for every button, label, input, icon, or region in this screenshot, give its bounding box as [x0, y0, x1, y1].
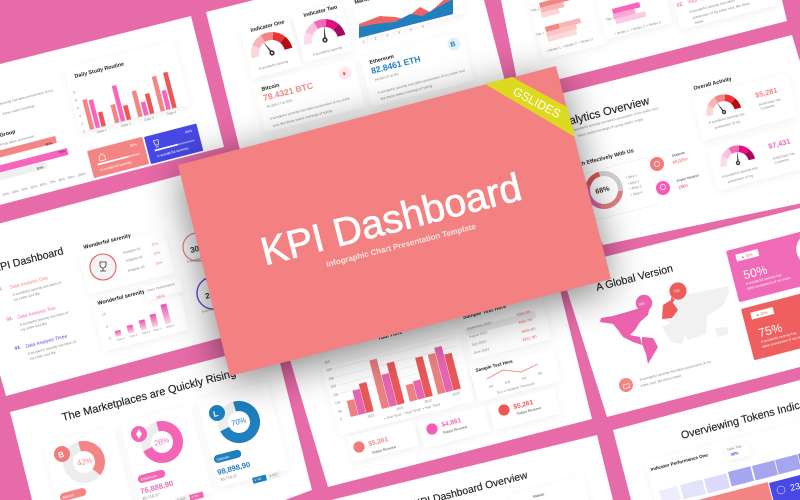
title: a global version: A Global Version: [595, 262, 674, 294]
card: 75% red: 75%: [757, 320, 784, 340]
card: daily study routine bar chart: 8: [75, 98, 78, 103]
item: data analysis two: 02.: [6, 316, 13, 322]
card: daily study routine bar chart: 9: [73, 91, 76, 95]
card: class performance bars: 0: [109, 336, 112, 341]
card: donut chart 68%: [575, 157, 661, 222]
item: data analysis two: Data Analysis Two: [17, 305, 57, 321]
card: bitcoin donut: [43, 427, 135, 500]
card: bitcoin: soul, like these sweet mornings of spring.: [272, 109, 333, 128]
card: class performance bars: Data 1: [116, 336, 126, 342]
card: sample text table: August 2023: [468, 330, 488, 339]
card: todays revenue pink: [418, 406, 490, 448]
card: todays revenue red: $5,261: [513, 399, 534, 411]
card: daily study routine bar chart: [64, 41, 190, 138]
card: todays revenue red: [488, 388, 560, 430]
ribbon: gslides: GSLIDES: [511, 84, 563, 121]
icon and global description: A wonderful serenity has taken possession of my: [639, 360, 712, 382]
progress bars: 40%: [36, 165, 44, 171]
card: ring 20 percent purple: A wonderful: [201, 306, 220, 314]
title: marketplaces rising: The Marketplaces are Quickly Rising: [61, 367, 237, 424]
card: numbered item 02: sweet: [694, 19, 704, 25]
card: indicator two gauge: Indicator Two: [303, 4, 339, 19]
card: yearly bar chart: 2022: [424, 398, 432, 404]
card: line chart: Text 1 Hundred Thousand: [496, 381, 535, 395]
card: daily study routine bar chart: Data 4: [166, 110, 177, 116]
card: 50% pink: [726, 225, 800, 302]
card: blue progress: [144, 123, 203, 164]
card: activity gauge red: Customer: [760, 103, 776, 111]
text block: analytics description: these sweet mornings of spring which I enjoy: [577, 117, 644, 138]
card: class performance bars: 5: [106, 325, 109, 329]
text block: partial description: [0, 88, 53, 116]
card: yearly bar chart: 200: [330, 384, 337, 389]
card: daily study routine bar chart: 0: [83, 129, 86, 134]
card: litecoin donut: ▸ Vol: [269, 472, 278, 478]
card: 50% pink: A wonderful serenity has: [745, 273, 782, 286]
card: donut chart 68%: ▪ Step 3: [629, 184, 642, 191]
card: class performance bars: Data 4: [153, 326, 162, 332]
card: market area chart: 1 2 3 4 5 6: [362, 24, 424, 44]
card: blue progress: 66%: [185, 129, 192, 134]
progress bars: [0, 129, 86, 197]
card: ring 20 percent purple: 25: [204, 290, 216, 301]
card: ethereum: B: [450, 41, 456, 49]
card: litecoin donut: 98,898,90: [216, 460, 251, 477]
card: class performance bars: Data 3: [141, 329, 151, 335]
card: sample text table: $368,890: [516, 310, 531, 317]
heading: overall activity: Overall Activity: [693, 76, 732, 92]
card: daily study routine bar chart: Data 2: [121, 122, 131, 128]
card: coral horizontal bar chart: [525, 0, 609, 60]
card: litecoin donut: [197, 382, 289, 487]
card: todays revenue pink: $4,861: [441, 417, 462, 429]
panel: indicators and crypto slide: [206, 0, 506, 150]
card: activity gauge red: A wonderful serenity has: [708, 112, 745, 125]
card: sample text table: $369,790: [518, 318, 533, 325]
callout: 75K: 75K: [673, 288, 681, 294]
card: todays revenue coral: $5,261: [368, 436, 389, 448]
card: litecoin donut: Litecoin: [216, 455, 230, 462]
item: data analysis one: Data Analysis One: [9, 275, 49, 291]
card: ring 30 percent: 30: [189, 244, 201, 255]
card: todays revenue coral: Todays Revenue: [371, 445, 397, 455]
card: statistic: [510, 476, 590, 500]
card: daily study routine bar chart: Data 1: [96, 128, 107, 134]
stat: students: 65,020+: [672, 156, 689, 165]
card: sample text table: July 2023: [471, 339, 486, 347]
card: numbered item 02: possession of my entire soul, like these: [692, 1, 750, 20]
callout: 75K: [669, 282, 687, 304]
card: yearly bar chart: [322, 328, 475, 436]
card: coral horizontal bar chart: ▪ Series 1 ▪ Series 2 ▪ Series 3: [546, 37, 593, 53]
card: ring 30 percent: [183, 233, 211, 264]
card: todays revenue pink: Todays Revenue: [442, 425, 468, 435]
card: blue progress: A wonderful serenity: [157, 146, 189, 158]
card: coral progress: A wonderful serenity: [100, 160, 132, 172]
card: line chart: [470, 348, 562, 402]
ribbon: gslides: [485, 77, 575, 137]
progress bars: 50% 60% 40% 50% 60% 70% 80% 90% 100%: [2, 172, 86, 197]
item: data analysis one: A wonderful serenity has taken of: [12, 281, 62, 297]
card: wonderful serenity rings: 40%: [153, 250, 161, 256]
card: daily study routine bar chart: 4: [79, 114, 82, 118]
progress bars: 80%: [45, 141, 53, 147]
item: data analysis three: my entire soul like: [29, 350, 57, 361]
card: wonderful serenity rings: Analysis 02: [125, 255, 143, 263]
card: bitcoin donut: 42%: [76, 455, 93, 468]
card: bitcoin donut: Bitcoin: [62, 493, 74, 500]
card: bitcoin: A wonderful serenity has taken possession of my entire: [269, 96, 350, 121]
card: indicator one gauge: [240, 17, 301, 78]
item: data analysis two: [6, 305, 69, 332]
card: sample text table: September 2023: [466, 321, 492, 331]
card: indicator one gauge: Indicator One: [250, 19, 285, 34]
card: ethereum: 82.8461 ETH: [370, 54, 422, 76]
card: yearly bar chart: 250: [328, 376, 335, 381]
main slide: kpi dashboard cover: [178, 66, 611, 384]
text block: partial description: serenity has taken possession of my: [0, 88, 53, 106]
card: ethereum: 84,262.07 at 6%: [374, 72, 399, 82]
card: activity gauge pink: Customer: [774, 157, 790, 165]
card: sample text table: $428,420: [521, 327, 536, 334]
stat: expert mentors: [656, 173, 700, 195]
text block: partial description: these sweet mornings: [2, 104, 35, 116]
card: todays revenue coral: [347, 420, 419, 462]
card: wonderful serenity rings: 20%: [151, 241, 159, 247]
heading: work with effectively: Work With Effectively With Us: [559, 148, 635, 173]
icon and global description: entire soul, like these sweet: [640, 374, 682, 388]
card: statistic: Statistic: [532, 492, 545, 499]
card: wonderful serenity rings: Analytics 01: [122, 246, 141, 255]
card: daily study routine bar chart: Daily Study Routine: [74, 61, 125, 80]
item: data analysis one: my entire soul like: [13, 291, 41, 302]
card: numbered item 02: 02.: [676, 1, 685, 9]
card: pink horizontal bar chart: [595, 0, 672, 40]
item: data analysis three: A wonderful serenity has taken of: [27, 340, 77, 356]
card: coral horizontal bar chart: Title 2: [530, 7, 540, 13]
card: litecoin donut: 70%: [230, 415, 247, 428]
card: donut chart 68%: 68%: [594, 183, 611, 196]
card: activity gauge pink: A wonderful serenity has: [721, 166, 758, 179]
card: bitcoin: 96,200.17 at 60%: [266, 98, 293, 109]
card: bitcoin: [253, 58, 365, 132]
card: donut chart 68%: ▪ Step 4: [630, 190, 643, 197]
icon and global description: [619, 360, 712, 392]
card: sample text table: Sample Text Here: [462, 304, 507, 321]
card: donut chart 68%: ▪ Step 1: [625, 173, 638, 180]
card: line chart: 2nd: [504, 380, 511, 385]
text block: analytics description: wonderful serenity has taken possession of my entire soul,: [573, 106, 659, 132]
card: yearly bar chart: ▪ Year Text1 ▪ Year Text2 ▪ Year Text3: [384, 402, 441, 421]
card: class performance bars: Data 5: [166, 323, 175, 329]
card: 75% red: ▲ 20%: [756, 310, 769, 317]
card: yearly bar chart: 2021: [367, 413, 375, 419]
card: class performance bars: 96%: [156, 293, 166, 300]
card: daily study routine bar chart: 2: [81, 122, 84, 126]
card: daily study routine bar chart: Data 3: [144, 116, 155, 122]
card: line chart: 4st: [488, 384, 494, 389]
card: wonderful serenity rings: Wonderful serenity: [83, 233, 132, 251]
item: data analysis two: A wonderful serenity has taken of: [19, 311, 69, 327]
panel: daily study routine slide: [0, 16, 224, 210]
card: indicator performance: Indicator Performance One: [650, 452, 709, 472]
card: class performance bars: Data 2: [129, 333, 138, 339]
card: activity gauge red: AVG/Order Per: [758, 97, 782, 107]
card: ethereum donut: Ethereum: [140, 474, 157, 482]
card: litecoin donut: $3,718.37: [220, 474, 238, 482]
card: todays revenue red: Todays Revenue: [516, 406, 542, 416]
card: yearly bar chart: 2021: [396, 406, 404, 411]
card: activity gauge pink: possession of my: [727, 173, 754, 184]
blue stat block: [769, 470, 800, 500]
callout: 96K: [636, 295, 652, 316]
world map: [600, 286, 729, 364]
card: daily study routine bar chart: 6: [77, 106, 80, 110]
card: numbered item 02: [670, 0, 778, 30]
card: litecoin donut: ▸ Vol: [254, 476, 262, 482]
card: class performance bars: 10: [101, 312, 106, 317]
card: activity gauge pink: $7,431: [767, 137, 791, 151]
card: line chart: Sample Text Here: [475, 358, 514, 373]
card: 50% pink: 50%: [742, 262, 769, 282]
card: wonderful serenity rings: 30%: [155, 260, 163, 266]
subtitle: infographic chart presentation template: Infographic Chart Presentation Template: [325, 222, 477, 269]
card: yearly bar chart: 150: [332, 392, 339, 398]
card: yearly bar chart: 300: [326, 367, 333, 373]
panel: overviewing tokens slide: [613, 380, 800, 500]
card: indicator performance: 38%: [730, 450, 739, 457]
panel: analytics overview slide: [540, 35, 800, 245]
card: indicator two gauge: [292, 1, 353, 62]
card: class performance bars: Wonderful serenity: [97, 289, 146, 307]
card: ring 30 percent: A wonderful: [186, 256, 205, 264]
panel: kpi dashboard list slide: [0, 170, 250, 396]
card: litecoin donut: L: [212, 409, 219, 419]
card: activity gauge pink: [707, 123, 800, 191]
card: indicator two gauge: A wonderful serenity: [312, 45, 343, 57]
panel: dashboard overview slide: [331, 435, 613, 500]
coral stat block: [698, 482, 775, 500]
card: ethereum donut: ▸ Vol: [191, 493, 199, 499]
item: data analysis three: [14, 333, 77, 361]
card: ethereum donut: [120, 405, 212, 500]
card: coral progress: [87, 137, 149, 178]
card: 75% red: [741, 283, 800, 360]
card: pink horizontal bar chart: Title 1: [605, 16, 615, 22]
card: 50% pink: taken possession of my entire: [747, 276, 791, 291]
card: indicator one gauge: A wonderful serenity: [258, 59, 289, 71]
card: 50% pink: ▲ 20%: [741, 252, 754, 259]
card: activity gauge pink: AVG/Order Per: [772, 151, 796, 161]
stat: students: [650, 151, 689, 171]
card: yearly bar chart: 350: [324, 360, 331, 365]
stat: expert mentors: 290+: [678, 183, 689, 190]
card: sample text table: June 2023: [473, 347, 490, 355]
card: sample text table: $232,780: [522, 335, 537, 342]
card: yearly bar chart: 0: [340, 417, 343, 422]
card: line chart: 3rd: [521, 376, 527, 381]
title: analytics overview: Analytics Overview: [555, 95, 651, 131]
card: indicator performance: [645, 419, 800, 500]
card: donut chart 68%: ▪ Step 2: [627, 179, 640, 186]
card: ethereum: A wonderful serenity has taken possession of my entire soul: [377, 69, 466, 95]
callout: 96K: 96K: [638, 301, 646, 307]
card: ethereum donut: 28%: [153, 435, 170, 448]
card: ring 20 percent purple: [197, 277, 229, 314]
panel: marketplaces slide: [10, 343, 312, 500]
card: yearly bar chart: Your Here: [377, 330, 403, 342]
panel: revenue chart slide: [290, 270, 592, 487]
card: yearly bar chart: 2023: [452, 391, 460, 397]
panel: horizontal bars slide: [501, 0, 787, 90]
card: yearly bar chart: 50: [338, 409, 342, 414]
item: data analysis three: 03.: [14, 345, 21, 351]
card: class performance bars: [92, 277, 189, 351]
item: data analysis two: my entire soul like: [20, 321, 48, 332]
card: wonderful serenity rings: [78, 230, 174, 295]
item: data analysis three: Data Analysis Three: [25, 333, 68, 350]
card: ethereum donut: 76,888,90: [139, 479, 174, 496]
card: market area chart: [352, 0, 466, 44]
item: data analysis one: [0, 275, 62, 302]
card: class performance bars: Class Performance: [146, 282, 175, 293]
card: coral progress: 80%: [130, 142, 137, 148]
card: wonderful serenity rings: Analysis 03: [127, 265, 145, 273]
card: ethereum: like these sweet mornings of spring.: [380, 84, 433, 101]
progress bars: A has taken possession: [0, 134, 35, 147]
card: line chart: 4th: [537, 371, 543, 376]
panel: a global version slide: [560, 208, 800, 417]
card: bitcoin donut: B: [57, 450, 65, 460]
card: activity gauge red: possession of my: [714, 119, 741, 130]
progress bars: 70%: [58, 149, 66, 155]
card: 75% red: A wonderful serenity has: [760, 331, 797, 344]
title: kpi dashboard: KPI Dashboard: [256, 165, 526, 274]
card: bitcoin: Bitcoin: [261, 83, 280, 93]
card: yearly bar chart: 100: [334, 400, 341, 405]
card: bitcoin: ♦: [342, 70, 347, 78]
card: coral horizontal bar chart: Title 1: [535, 31, 545, 37]
card: activity gauge red: [692, 73, 798, 141]
card: pink horizontal bar chart: ▪ Series 1 ▪ Series 2 ▪ Series 3: [614, 20, 661, 36]
card: sample text table: [461, 294, 552, 360]
card: activity gauge red: $5,281: [754, 86, 778, 100]
card: ethereum: [360, 32, 474, 106]
stat: students: Students: [671, 151, 686, 158]
card: ethereum: Ethereum: [369, 54, 395, 66]
card: bitcoin: 78.4321 BTC: [262, 80, 314, 103]
stat: expert mentors: Expert Mentors: [676, 173, 700, 183]
card: indicator performance: Table Title: [726, 444, 742, 452]
